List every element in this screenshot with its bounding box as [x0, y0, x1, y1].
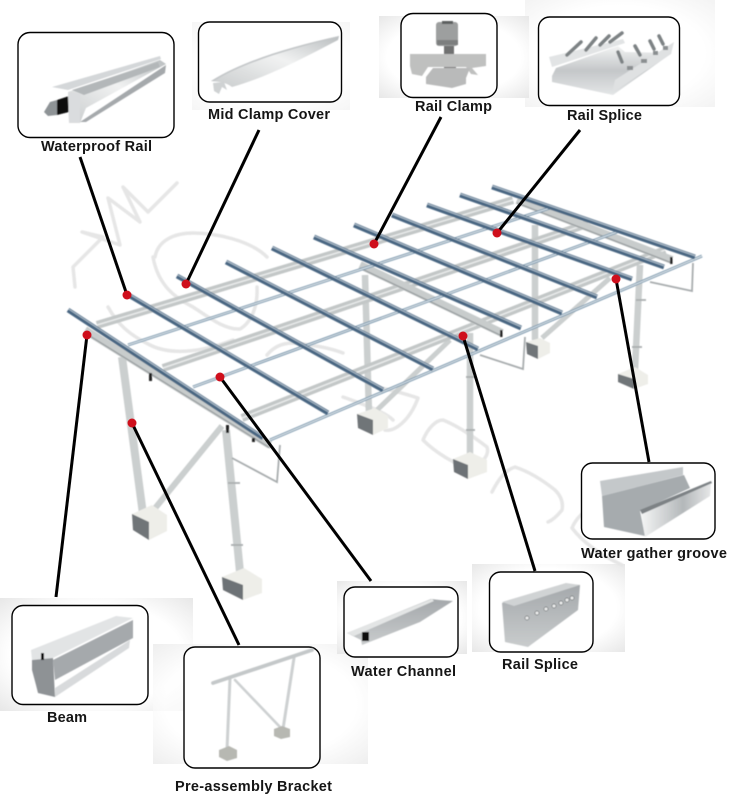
- leader lines: [56, 117, 649, 645]
- panel: Rail Clamp: [401, 14, 497, 115]
- label: Water Channel: [351, 664, 456, 680]
- panel: Water Channel: [344, 587, 458, 680]
- icon: water gather groove profile: [600, 467, 712, 537]
- small black beam ends: [149, 257, 672, 442]
- label: Mid Clamp Cover: [208, 107, 330, 123]
- panel: Waterproof Rail: [18, 32, 174, 155]
- watermark logo: [73, 183, 628, 565]
- panel: Pre-assembly Bracket: [175, 647, 332, 795]
- label: Beam: [47, 710, 87, 726]
- panel: Beam: [12, 606, 148, 726]
- blue rails: [68, 186, 696, 438]
- icon: rail splice box: [502, 583, 580, 647]
- label: Rail Clamp: [415, 99, 492, 115]
- panel: Water gather groove: [581, 463, 727, 562]
- icon: mid clamp cover profile: [211, 36, 339, 94]
- cross tubes: [128, 208, 702, 440]
- label: Pre-assembly Bracket: [175, 779, 332, 795]
- label: Waterproof Rail: [41, 139, 152, 155]
- concrete footing blocks: [132, 338, 648, 600]
- beams: [85, 200, 672, 448]
- icon: beam profile: [31, 616, 133, 697]
- red marker dots: [82, 228, 620, 428]
- label: Rail Splice: [567, 108, 642, 124]
- icon: rail clamp hardware: [410, 21, 486, 88]
- posts and braces: [122, 225, 693, 572]
- panel: Mid Clamp Cover: [198, 22, 342, 123]
- icon: pre-assembly bracket: [213, 650, 312, 761]
- icon: water channel profile: [347, 599, 453, 645]
- carport structure: [68, 186, 702, 600]
- icon: waterproof rail profile: [44, 56, 166, 123]
- label: Rail Splice: [502, 657, 578, 673]
- panel: Rail Splice (bottom): [490, 572, 593, 673]
- label: Water gather groove: [581, 546, 727, 562]
- icon: rail splice with screws: [549, 33, 674, 95]
- panel: Rail Splice (top): [538, 17, 680, 124]
